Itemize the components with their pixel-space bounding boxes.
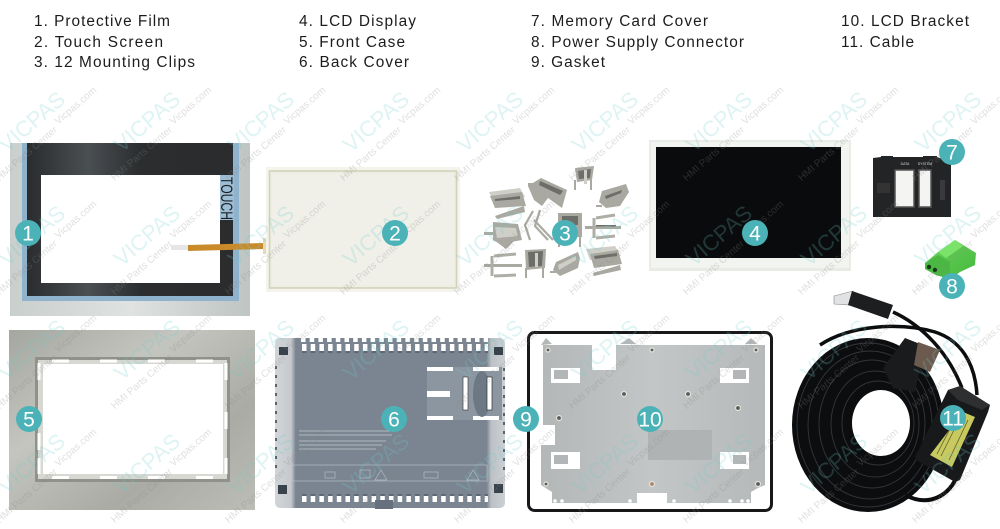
list column 2: 5. Front Case (299, 34, 405, 51)
watermarks: Vicpas.com (740, 427, 786, 469)
clip 12 (586, 246, 622, 276)
watermarks: HMI Parts Center (452, 466, 518, 526)
part 11: cable (792, 291, 990, 512)
watermarks: VICPAS (681, 428, 757, 499)
warning print (299, 431, 394, 449)
watermarks: HMI Parts Center (223, 124, 289, 184)
watermarks: VICPAS (910, 200, 986, 271)
watermarks: Vicpas.com (626, 313, 672, 355)
watermarks: HMI Parts Center (567, 466, 633, 526)
badge 11: 11 (942, 408, 964, 430)
list column 1 (34, 13, 195, 71)
clip 1 (489, 188, 526, 219)
part 8: power supply connector (925, 240, 976, 279)
watermarks: HMI Parts Center (910, 466, 976, 526)
watermarks: Vicpas.com (740, 313, 786, 355)
part 7: memory card cover (873, 156, 951, 217)
watermarks: Vicpas.com (511, 313, 557, 355)
watermarks: HMI Parts Center (910, 352, 976, 412)
watermarks: VICPAS (452, 86, 528, 157)
badge 10: 10 (638, 408, 662, 432)
watermarks: VICPAS (796, 314, 872, 385)
watermarks: VICPAS (109, 86, 185, 157)
badge 7 (939, 139, 965, 165)
watermarks: VICPAS (338, 86, 414, 157)
side vents (275, 366, 277, 470)
clip 9 (484, 254, 522, 276)
watermarks: Vicpas.com (626, 199, 672, 241)
watermarks: VICPAS (223, 428, 299, 499)
watermarks: Vicpas.com (282, 199, 328, 241)
watermarks: HMI Parts Center (338, 124, 404, 184)
watermarks: HMI Parts Center (681, 466, 747, 526)
badge 1 (15, 220, 41, 246)
badge 8: 8 (946, 276, 958, 298)
list column 3: 9. Gasket (531, 54, 606, 71)
watermarks: VICPAS (567, 86, 643, 157)
corner latches (278, 347, 503, 494)
badge 7: 7 (946, 142, 958, 164)
badge 1: 1 (22, 222, 34, 246)
part 6: back cover (275, 338, 505, 509)
part 2: touch screen (266, 167, 460, 292)
watermarks: VICPAS (567, 200, 643, 271)
watermarks: Vicpas.com (855, 427, 901, 469)
watermarks: Vicpas.com (53, 199, 99, 241)
list column 4: 10. LCD Bracket (841, 13, 970, 30)
watermarks: VICPAS (567, 314, 643, 385)
watermarks: Vicpas.com (397, 427, 443, 469)
bottom vents (302, 495, 488, 499)
watermarks: VICPAS (910, 86, 986, 157)
list column 4 (841, 13, 970, 51)
clip 2 (528, 178, 567, 208)
watermarks: Vicpas.com (855, 313, 901, 355)
bracket windows (551, 368, 749, 469)
watermarks: VICPAS (338, 314, 414, 385)
watermarks: HMI Parts Center (338, 238, 404, 298)
part 3: mounting clips (484, 166, 629, 278)
badge 8 (939, 273, 965, 299)
watermarks: HMI Parts Center (681, 238, 747, 298)
part 4: LCD display (649, 140, 851, 271)
list column 2: 4. LCD Display (299, 13, 416, 30)
badge 4 (742, 220, 768, 246)
watermarks: Vicpas.com (626, 85, 672, 127)
watermarks: VICPAS (681, 200, 757, 271)
clip 7 (558, 213, 582, 247)
watermarks: Vicpas.com (855, 85, 901, 127)
watermarks: VICPAS (796, 428, 872, 499)
badge 6 (381, 406, 407, 432)
watermarks: Vicpas.com (397, 199, 443, 241)
memory card recess (427, 367, 502, 420)
watermarks: VICPAS (109, 200, 185, 271)
watermarks: VICPAS (681, 86, 757, 157)
watermarks: VICPAS (223, 200, 299, 271)
watermarks: Vicpas.com (168, 427, 214, 469)
badge 4: 4 (749, 222, 761, 246)
watermarks: HMI Parts Center (567, 124, 633, 184)
watermarks: Vicpas.com (168, 199, 214, 241)
list column 1: 3. 12 Mounting Clips (34, 54, 195, 71)
list column 1: 1. Protective Film (34, 13, 170, 30)
watermarks: VICPAS (109, 314, 185, 385)
watermarks: VICPAS (223, 86, 299, 157)
watermarks: HMI Parts Center (452, 352, 518, 412)
watermarks: VICPAS (109, 428, 185, 499)
part 5: front case (9, 330, 255, 510)
badge 5: 5 (23, 408, 35, 432)
watermarks: HMI Parts Center (796, 124, 862, 184)
USB plug (834, 291, 893, 319)
part 1: protective film: TOUCH (217, 177, 236, 220)
watermarks: VICPAS (910, 428, 986, 499)
list column 3: 7. Memory Card Cover (531, 13, 708, 30)
part 1: protective film (10, 143, 269, 316)
serial connector (883, 338, 940, 392)
watermarks: VICPAS (338, 200, 414, 271)
watermarks: HMI Parts Center (567, 352, 633, 412)
watermarks: HMI Parts Center (338, 352, 404, 412)
watermarks: VICPAS (452, 428, 528, 499)
watermarks: VICPAS (796, 200, 872, 271)
watermarks: HMI Parts Center (109, 466, 175, 526)
watermarks: HMI Parts Center (223, 238, 289, 298)
watermarks: HMI Parts Center (452, 238, 518, 298)
part 7: memory card cover: DATA (901, 162, 910, 166)
watermarks: VICPAS (681, 314, 757, 385)
watermarks: HMI Parts Center (109, 352, 175, 412)
watermarks: HMI Parts Center (910, 238, 976, 298)
list column 4: 11. Cable (841, 34, 914, 51)
badge 3: 3 (559, 222, 571, 246)
watermarks: Vicpas.com (282, 85, 328, 127)
clip 8 (585, 215, 621, 238)
watermarks: VICPAS (796, 86, 872, 157)
watermarks: HMI Parts Center (796, 352, 862, 412)
watermarks: HMI Parts Center (796, 466, 862, 526)
watermarks: HMI Parts Center (109, 124, 175, 184)
watermarks: Vicpas.com (740, 85, 786, 127)
clip 10 (525, 249, 546, 278)
watermarks: HMI Parts Center (452, 124, 518, 184)
adapter box (915, 386, 990, 482)
bracket screws (544, 348, 760, 486)
list column 1: 2. Touch Screen (34, 34, 163, 51)
watermarks: HMI Parts Center (681, 124, 747, 184)
badge 9: 9 (520, 408, 532, 432)
parts list (34, 13, 970, 71)
watermarks: VICPAS (338, 428, 414, 499)
clip 6 (525, 210, 553, 240)
watermarks: HMI Parts Center (567, 238, 633, 298)
badge 2 (382, 220, 408, 246)
watermarks: HMI Parts Center (910, 124, 976, 184)
watermarks: Vicpas.com (511, 427, 557, 469)
badge 3 (552, 220, 578, 246)
watermarks: Vicpas.com (397, 313, 443, 355)
part 9: gasket (528, 332, 772, 510)
cable coil (792, 312, 977, 512)
watermarks: VICPAS (567, 428, 643, 499)
watermarks: HMI Parts Center (796, 238, 862, 298)
clip 11 (550, 252, 580, 276)
clip 3 (574, 166, 594, 190)
watermarks: Vicpas.com (282, 427, 328, 469)
watermarks: HMI Parts Center (223, 352, 289, 412)
list column 3 (531, 13, 744, 71)
clip 4 (596, 184, 629, 208)
watermarks: Vicpas.com (168, 85, 214, 127)
badge 2: 2 (389, 222, 401, 246)
watermarks: Vicpas.com (740, 199, 786, 241)
watermarks: Vicpas.com (53, 85, 99, 127)
watermarks: Vicpas.com (282, 313, 328, 355)
list column 2: 6. Back Cover (299, 54, 409, 71)
badge 5 (16, 406, 42, 432)
watermarks: HMI Parts Center (338, 466, 404, 526)
connector legend (292, 465, 487, 481)
watermarks: Vicpas.com (397, 85, 443, 127)
list column 2 (299, 13, 416, 71)
list column 3: 8. Power Supply Connector (531, 34, 744, 51)
watermarks: VICPAS (452, 200, 528, 271)
watermarks: Vicpas.com (53, 427, 99, 469)
watermarks: HMI Parts Center (109, 238, 175, 298)
watermarks: Vicpas.com (511, 199, 557, 241)
watermarks: Vicpas.com (511, 85, 557, 127)
watermarks: HMI Parts Center (223, 466, 289, 526)
watermarks: VICPAS (452, 314, 528, 385)
watermarks: Vicpas.com (168, 313, 214, 355)
watermarks: VICPAS (910, 314, 986, 385)
clip 5 (484, 222, 522, 249)
watermarks: Vicpas.com (626, 427, 672, 469)
watermarks: Vicpas.com (53, 313, 99, 355)
watermarks: Vicpas.com (855, 199, 901, 241)
watermarks: HMI Parts Center (681, 352, 747, 412)
badge 6: 6 (388, 408, 400, 432)
part 10: LCD bracket (541, 338, 765, 503)
badge 9 (513, 406, 539, 432)
top vents (301, 340, 488, 352)
part 7: memory card cover: SYSTEM (918, 162, 932, 166)
watermarks: VICPAS (223, 314, 299, 385)
